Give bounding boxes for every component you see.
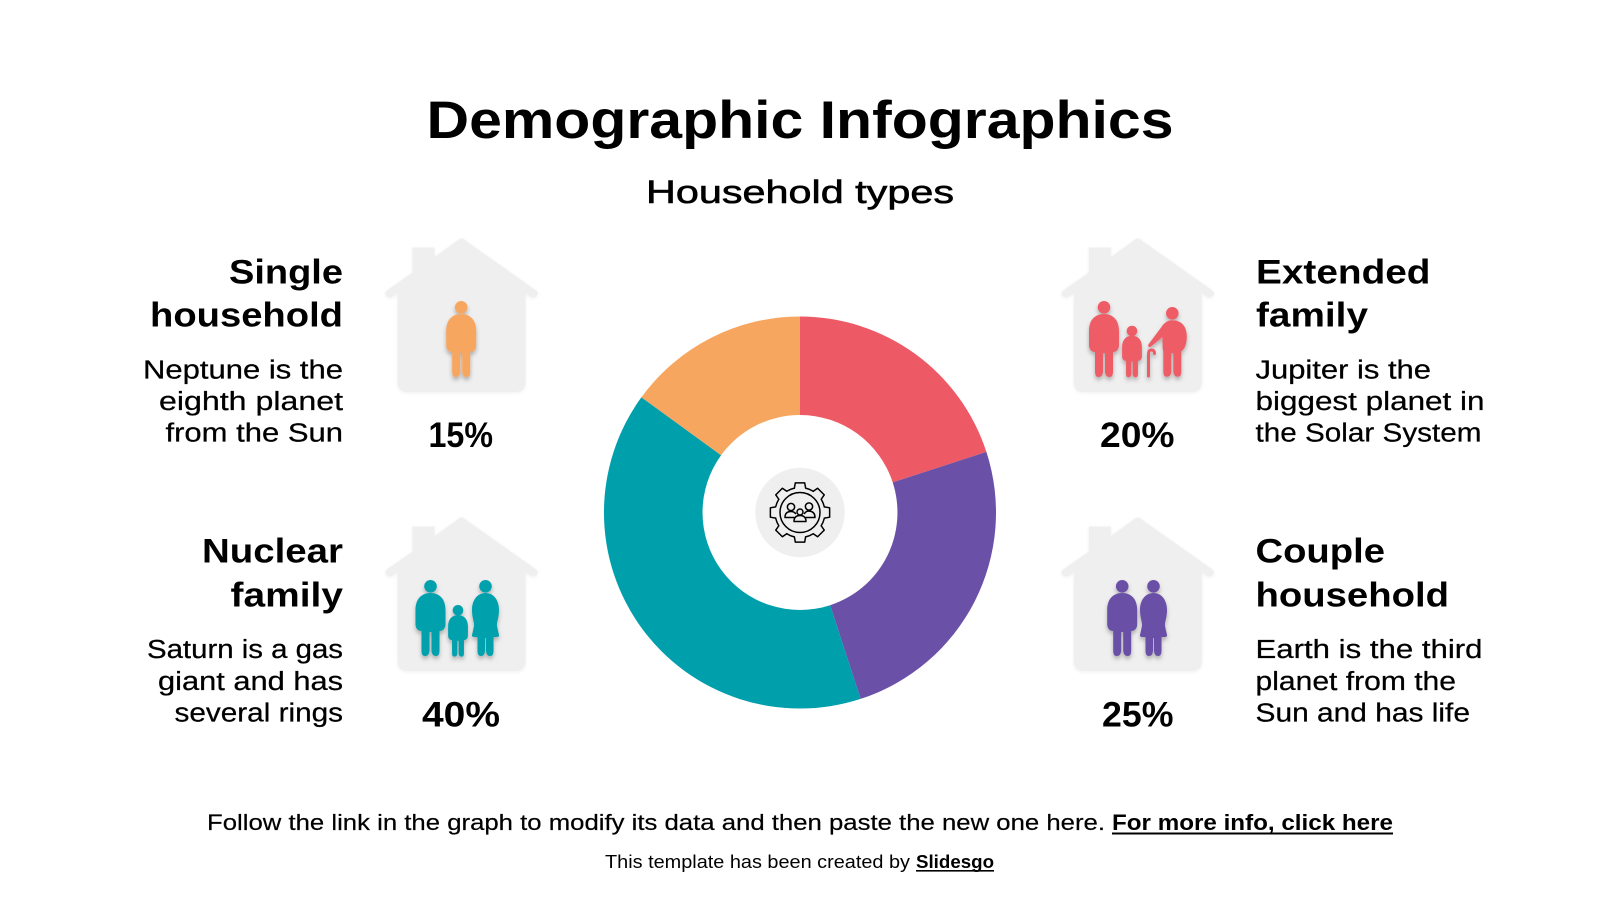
- panel: single household text: [143, 253, 343, 448]
- footer credit: Slidesgo: [916, 852, 994, 872]
- segment: nuclear family 40%: [604, 397, 861, 709]
- segment: extended family 20%: [800, 316, 986, 482]
- text: Saturn: [147, 636, 343, 728]
- text: Neptune: Neptune is the: [143, 356, 343, 384]
- heading: nuclear family: [202, 532, 343, 614]
- panel: nuclear family text: [147, 532, 343, 728]
- text: Jupiter: biggest planet in: [1256, 388, 1484, 416]
- icon: house with nuclear family: [385, 518, 538, 671]
- text: Earth: [1256, 636, 1482, 728]
- text: Saturn: giant and has: [158, 668, 343, 696]
- percentage: 20%: 20%: [1100, 416, 1174, 455]
- heading: nuclear family: family: [230, 576, 343, 614]
- text: Earth: Earth is the third: [1256, 636, 1482, 664]
- subtitle: Household types: [646, 174, 954, 210]
- text: Neptune: [143, 356, 343, 448]
- text: Jupiter: the Solar System: [1256, 420, 1482, 448]
- heading: couple household: [1256, 532, 1449, 614]
- text: Jupiter: Jupiter is the: [1256, 356, 1431, 384]
- percentage: 25%: 25%: [1102, 696, 1174, 734]
- icon: house with couple: [1062, 518, 1214, 671]
- text: Neptune: from the Sun: [166, 420, 343, 448]
- heading: couple household: Couple: [1256, 532, 1385, 570]
- percentage: 15%: 15%: [428, 416, 493, 455]
- segment: single household 15%: [641, 316, 800, 455]
- title: Demographic Infographics: [426, 91, 1174, 150]
- icon: gear with people: [755, 468, 845, 557]
- footer note: Follow the link in the graph to modify its data and then paste the new one here.: [207, 810, 1105, 835]
- heading: single household: household: [150, 297, 343, 335]
- heading: single household: Single: [229, 253, 343, 291]
- text: Saturn: Saturn is a gas: [147, 636, 343, 664]
- panel: couple household text: [1256, 532, 1482, 728]
- icon: house with extended family: [1062, 238, 1214, 392]
- heading: nuclear family: Nuclear: [202, 532, 343, 570]
- footer credit: This template has been created by: [605, 852, 910, 872]
- text: Jupiter: [1256, 356, 1484, 448]
- text: Earth: Sun and has life: [1256, 700, 1470, 728]
- heading: extended family: Extended: [1256, 253, 1430, 291]
- heading: extended family: [1256, 253, 1430, 335]
- panel: extended family text: [1256, 253, 1484, 448]
- text: Earth: planet from the: [1256, 668, 1456, 696]
- text: Neptune: eighth planet: [159, 388, 343, 416]
- icon: house with single person: [385, 238, 538, 392]
- heading: couple household: household: [1256, 576, 1449, 614]
- segment: couple household 25%: [830, 452, 996, 699]
- heading: single household: [150, 253, 343, 335]
- text: Saturn: several rings: [174, 700, 343, 728]
- percentage: 40%: 40%: [422, 696, 500, 734]
- heading: extended family: family: [1256, 297, 1368, 335]
- footer note: For more info, click here: [1112, 810, 1393, 835]
- donut chart: [604, 316, 996, 709]
- footer note: [207, 810, 1393, 835]
